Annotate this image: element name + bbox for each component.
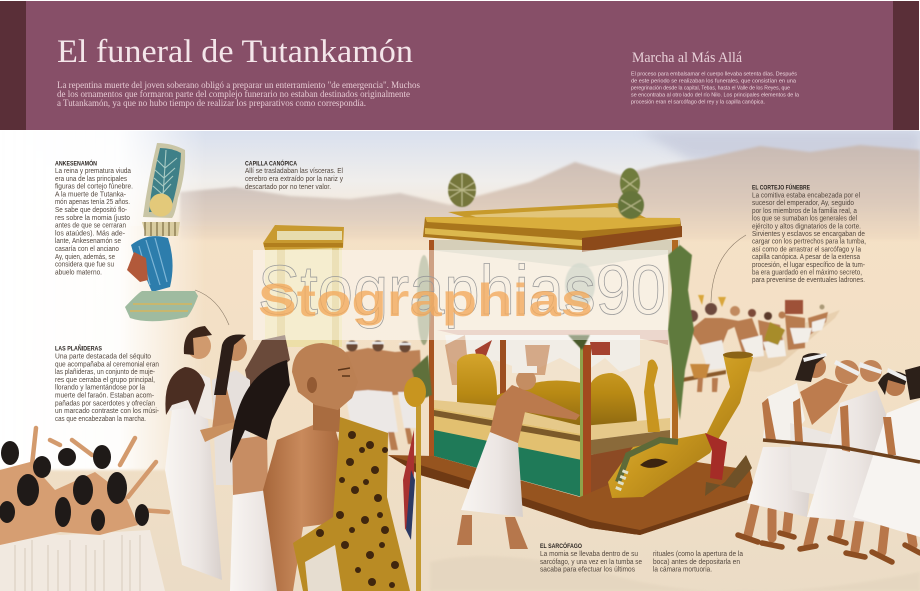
golden horn prow — [608, 352, 753, 498]
callout: El cortejo fúnebre: capilla canópica. A pesar de la extensa — [752, 252, 861, 261]
callout: Ankesenamón: considera que fue su — [55, 260, 114, 269]
callout: El sarcófago: sacaba para efectuar los últimos — [540, 564, 635, 574]
mourners group — [0, 428, 168, 591]
callout: Ankesenamón: res sobre la momia (justo — [55, 213, 130, 222]
sidebar text: de este periodo se realizaban los funerales, que consistían en una — [631, 78, 797, 84]
callout: El sarcófago: rituales (como la apertura de la — [653, 549, 744, 558]
callout: Ankesenamón: La reina y prematura viuda — [55, 166, 132, 175]
callout: Ankesenamón: figuras del cortejo fúnebre. — [55, 182, 133, 191]
priest with leopard skin — [263, 343, 410, 591]
callout: Ankesenamón — [55, 158, 133, 276]
pointer lines — [195, 235, 746, 325]
royal shrine with sarcophagus — [423, 203, 682, 498]
sidebar text: peregrinación desde la capital, Tebas, hasta el Valle de los Reyes, que — [631, 85, 790, 91]
callout: Las plañideras: un marcado contraste con los músi- — [55, 406, 159, 415]
sidebar text: El proceso para embalsamar el cuerpo llevaba setenta días. Después — [631, 71, 797, 77]
watermark: Stographias90 — [258, 251, 666, 329]
sidebar text — [631, 71, 800, 105]
callout: Las plañideras: res que cerraba el grupo principal, — [55, 375, 155, 384]
callout: El cortejo fúnebre: procesión, el lugar específico de la tum- — [752, 260, 865, 269]
callout: Capilla canópica: descartado por no tener valor. — [245, 182, 331, 191]
striped pole — [403, 377, 426, 591]
intro text: La repentina muerte del joven soberano obligó a preparar un enterramiento "de emergencia". Muchos — [57, 80, 420, 90]
callout: El cortejo fúnebre: Sirvientes y esclavos se encargaban de — [752, 229, 865, 238]
sidebar text: procesión eran el sarcófago del rey y la capilla canópica. — [631, 99, 765, 105]
callout: El cortejo fúnebre: así como de arrastrar el sarcófago y la — [752, 244, 862, 253]
callout: Capilla canópica — [245, 158, 343, 191]
watermark: Stographias — [258, 274, 593, 326]
callout: El cortejo fúnebre: cargar con los pertrechos para la tumba, — [752, 237, 866, 246]
callout: El sarcófago: sarcófago, y una vez en la tumba se — [540, 557, 642, 566]
callout: Capilla canópica: Allí se trasladaban las vísceras. El — [245, 166, 343, 175]
callout: El cortejo fúnebre — [752, 182, 866, 284]
callout: El cortejo fúnebre: ejército y altos dignatarios de la corte. — [752, 221, 861, 230]
callout: Ankesenamón: A la muerte de Tutanka- — [55, 189, 126, 198]
callout: El cortejo fúnebre: los que se sumaban los generales del — [752, 214, 857, 223]
callout: El cortejo fúnebre: para prevenirse de eventuales ladrones. — [752, 275, 865, 284]
title: El funeral de Tutankamón — [57, 34, 413, 70]
intro text: de los ornamentos que formaron parte del complejo funerario no estaban destinados originalmente — [57, 89, 410, 99]
capilla canópica chest — [263, 225, 344, 347]
callout: Ankesenamón: antes de que se cerraran — [55, 221, 126, 230]
callout: Capilla canópica: cerebro era extraído por la nariz y — [245, 174, 343, 183]
callout: Las plañideras: LAS PLAÑIDERAS — [55, 344, 102, 352]
subheading: Marcha al Más Allá — [632, 50, 742, 66]
callout: Ankesenamón: ANKESENAMÓN — [55, 158, 97, 168]
callout: Ankesenamón: casaría con el anciano — [55, 244, 119, 253]
callout: Las plañideras: muerte del faraón. Estaban acom- — [55, 390, 154, 400]
callout: El sarcófago: la cámara mortuoria. — [653, 564, 712, 574]
distant procession left — [345, 340, 422, 450]
callout: El sarcófago — [540, 541, 744, 574]
callout: Ankesenamón: lante, Ankesenamón se — [55, 236, 121, 245]
desert scene backdrop — [0, 125, 920, 591]
callout: Capilla canópica: CAPILLA CANÓPICA — [245, 158, 297, 168]
callout: El sarcófago: boca) antes de depositarla en — [653, 557, 740, 566]
callout: El cortejo fúnebre: ba era guardado en el máximo secreto, — [752, 268, 862, 276]
palm decorations — [412, 168, 694, 420]
callout: Ankesenamón: era una de las principales — [55, 174, 127, 183]
callout: El cortejo fúnebre: sucesor del emperador, Ay, seguido — [752, 198, 854, 207]
callout: El cortejo fúnebre: por los miembros de la familia real, a — [752, 206, 858, 215]
callout: Ankesenamón: Ay, quien, además, se — [55, 252, 115, 261]
callout: El cortejo fúnebre: EL CORTEJO FÚNEBRE — [752, 182, 810, 192]
callout: El sarcófago: La momia se llevaba dentro de su — [540, 549, 638, 558]
callout: El cortejo fúnebre: La comitiva estaba encabezada por el — [752, 190, 860, 200]
intro text: a Tutankamón, ya que no hubo tiempo de realizar los preparativos como correspondía. — [57, 98, 366, 108]
woman with dark hair — [230, 360, 290, 591]
callout: Las plañideras: que acompañaba al ceremonial eran — [55, 359, 159, 368]
callout: Las plañideras: pañadas por sacerdotes y ofrecían — [55, 398, 155, 407]
callout: Ankesenamón: món apenas tenía 25 años. — [55, 197, 130, 206]
sled — [388, 455, 756, 535]
noble women — [165, 326, 290, 580]
callout: Las plañideras: Una parte destacada del séquito — [55, 352, 151, 360]
sidebar text: se encontraba al otro lado del río Nilo. Los principales elementos de la — [631, 92, 800, 98]
distant procession right — [682, 295, 840, 392]
pullers — [738, 353, 920, 562]
callout: Las plañideras — [55, 344, 159, 423]
callout: Las plañideras: las plañideras, un conjunto de muje- — [55, 367, 155, 376]
Ankesenamón bust — [125, 143, 198, 321]
callout: El sarcófago: EL SARCÓFAGO — [540, 541, 582, 550]
intro text — [57, 80, 420, 108]
callout: Ankesenamón: abuelo materno. — [55, 267, 102, 276]
priest pulling sarcophagus — [457, 366, 580, 549]
callout: Las plañideras: llorando y lamentándose por la — [55, 383, 146, 392]
header band — [0, 0, 920, 131]
callout: Ankesenamón: los ataúdes). Más ade- — [55, 228, 125, 237]
callout: Ankesenamón: Se sabe que depositó flo- — [55, 205, 127, 214]
callout: Las plañideras: cas que encabezaban la marcha. — [55, 414, 146, 423]
